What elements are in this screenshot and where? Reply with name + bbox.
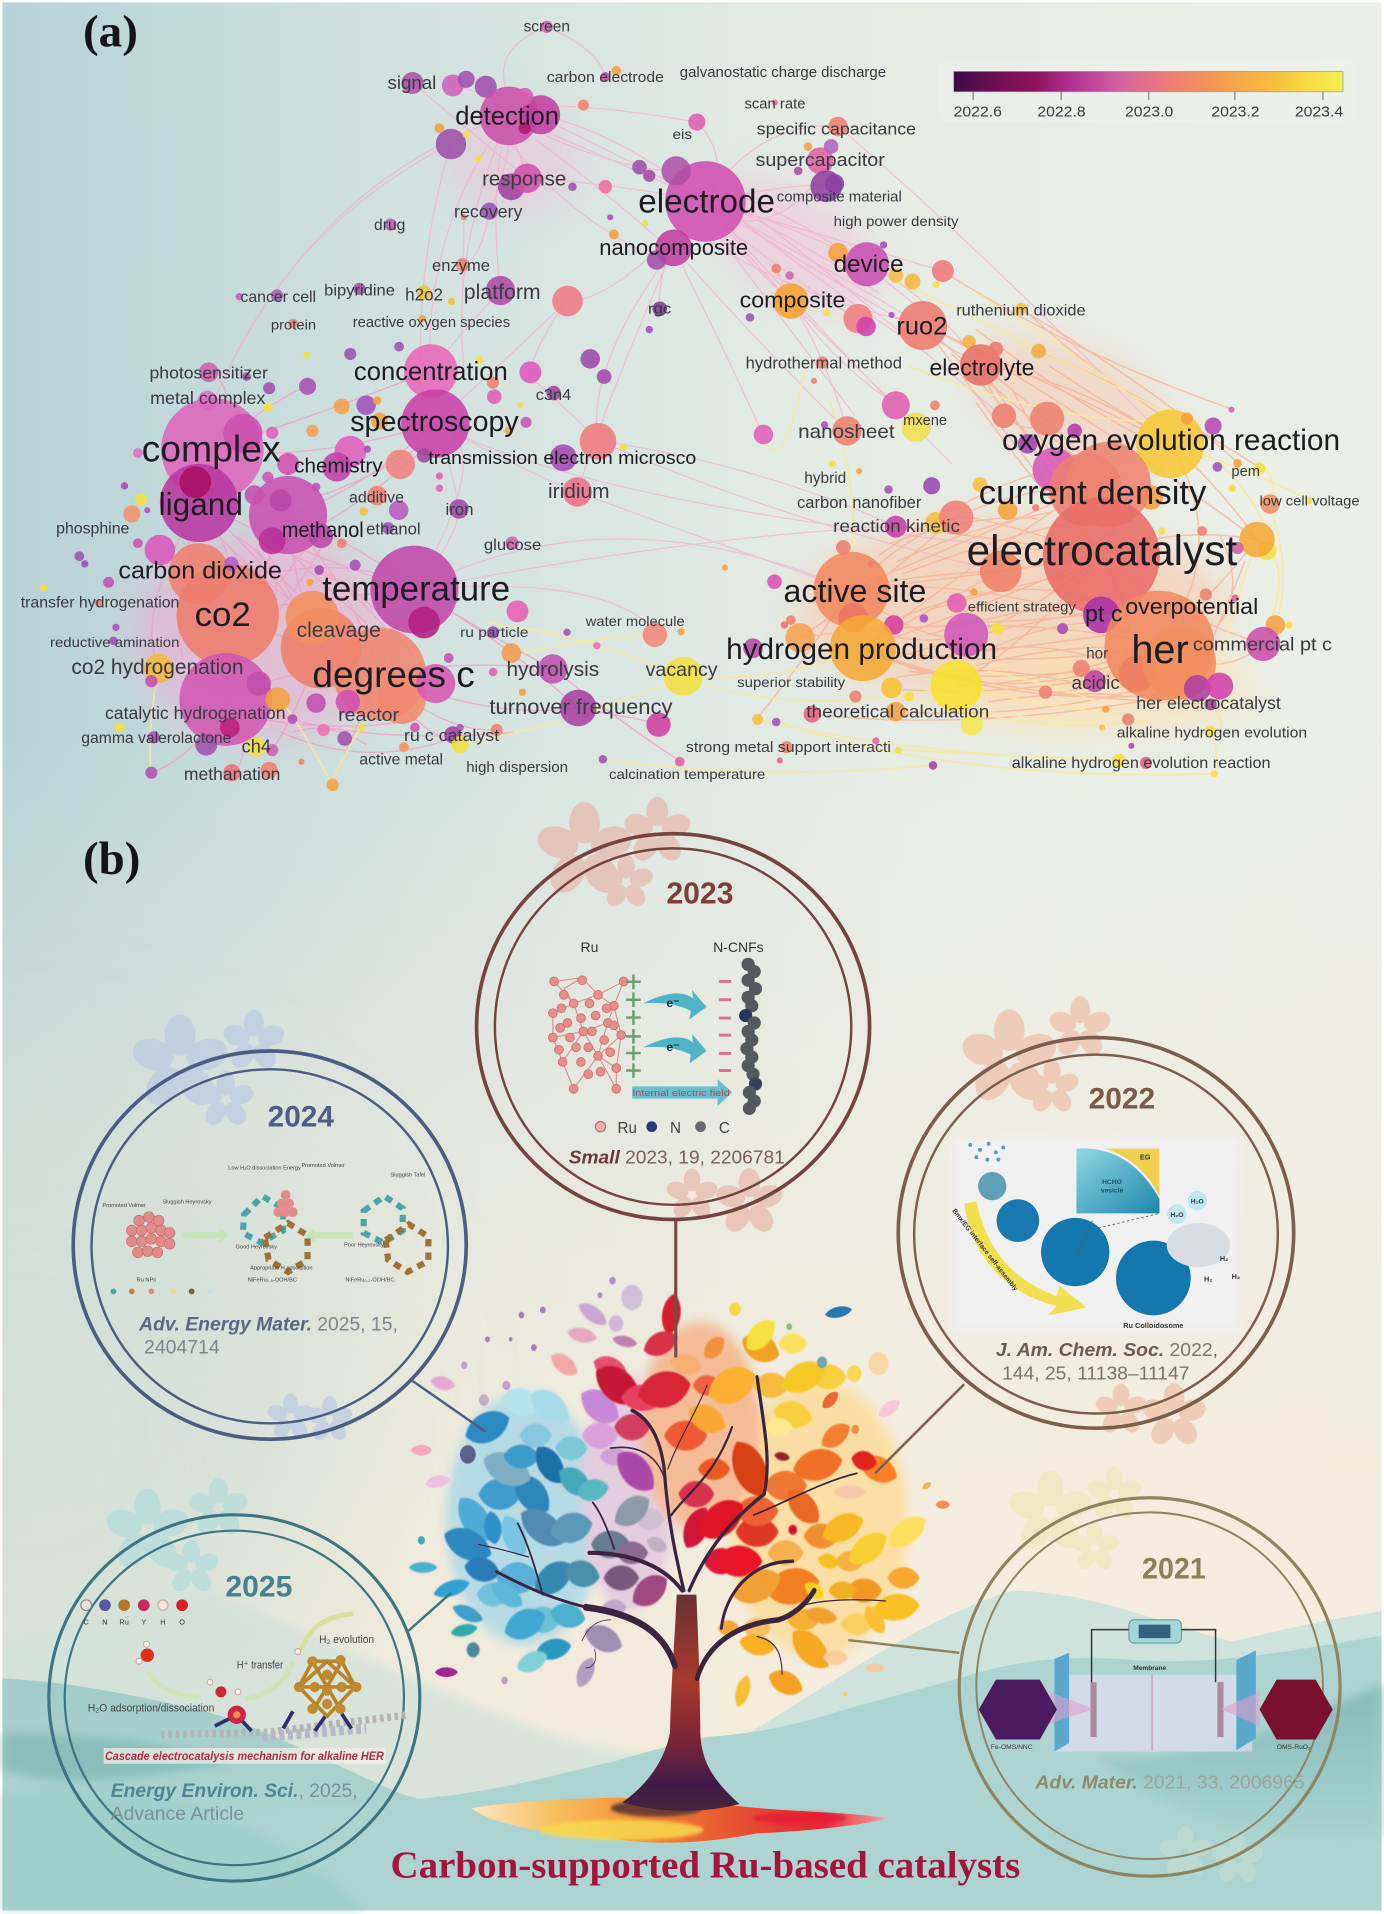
decorative flowers behind timeline circles: [103, 797, 1265, 1885]
element legend: N: [102, 1618, 108, 1627]
keyword: reductive amination: reductive amination: [50, 634, 179, 650]
colour legend: publication year: 2022.8: [1037, 105, 1086, 121]
panel: 2021 milestone: [959, 1498, 1340, 1876]
keyword: c3n4: c3n4: [536, 387, 571, 404]
keyword: commercial pt c: commercial pt c: [1193, 635, 1332, 655]
keyword: theoretical calculation: theoretical calculation: [806, 702, 989, 722]
element legend: N: [670, 1120, 681, 1137]
keyword: ruo2: ruo2: [896, 312, 947, 340]
keyword: rgc: rgc: [648, 302, 671, 318]
keyword: transfer hydrogenation: transfer hydrogenation: [21, 594, 179, 611]
keyword: pt c: pt c: [1085, 600, 1122, 626]
year: 2021: 2021: [1142, 1552, 1206, 1585]
panel: 2023 milestone: [477, 834, 870, 1219]
keyword: concentration: concentration: [354, 358, 508, 386]
schematic captions: NiFeRu₀.₅-OOH/BC: [248, 1278, 297, 1284]
network link density washes: [134, 104, 1257, 739]
schematic: electrolyser cell: [979, 1620, 1333, 1752]
keyword: electrode: electrode: [638, 182, 775, 219]
schematic labels: Ru and N-CNFs: Ru: [581, 939, 598, 955]
colour legend: publication year: 2023.4: [1295, 105, 1343, 121]
colour legend: publication year: 2023.2: [1211, 105, 1260, 121]
electron transfer arrows: e⁻: [666, 1040, 680, 1054]
citation: Energy Environ. Sci.: Energy Environ. Sci., 2025,: [111, 1780, 358, 1802]
panel label: (b): (b): [83, 834, 140, 885]
panel: 2024 milestone: [73, 1051, 466, 1439]
schematic: cascade mechanism: H₂ evolution: [319, 1634, 374, 1646]
keyword: degrees c: degrees c: [312, 654, 475, 695]
keyword: efficient strategy: efficient strategy: [968, 600, 1076, 615]
panel: 2025 milestone: [49, 1515, 420, 1881]
keyword: methanation: methanation: [184, 765, 280, 784]
network nodes: top cluster: [236, 21, 746, 364]
keyword: superior stability: superior stability: [737, 675, 845, 690]
keyword: calcination temperature: calcination temperature: [609, 767, 765, 783]
schematic: electrolyser cell: Fe-OMS/NNC: [991, 1744, 1033, 1751]
citation: Adv. Energy Mater.: 2404714: [144, 1338, 220, 1359]
year: 2023: 2023: [666, 877, 733, 910]
keyword: spectroscopy: spectroscopy: [350, 406, 519, 438]
schematic labels: Ru and N-CNFs: N-CNFs: [713, 939, 764, 955]
keyword: hor: hor: [1086, 646, 1108, 663]
schematic: electrolyser cell: OMS-RuO₂: [1277, 1744, 1311, 1751]
schematic: Ru colloidosome assembly: H₂O: [1170, 1212, 1184, 1219]
keyword: signal: signal: [387, 72, 436, 93]
keyword: reactor: reactor: [338, 705, 399, 726]
element legend: C: [719, 1120, 730, 1137]
keyword: reaction kinetic: reaction kinetic: [833, 516, 960, 536]
schematic: Ru colloidosome assembly: H₂O: [1191, 1199, 1204, 1206]
keyword: ch4: ch4: [242, 737, 271, 758]
keyword: glucose: glucose: [484, 537, 541, 554]
keyword: co2 hydrogenation: co2 hydrogenation: [71, 656, 243, 679]
keyword: iridium: iridium: [548, 480, 610, 503]
keyword: reactive oxygen species: reactive oxygen species: [353, 315, 510, 331]
colour legend: publication year: 2022.6: [954, 105, 1002, 121]
schematic: Ru colloidosome assembly: [950, 1138, 1240, 1331]
keyword: eis: eis: [672, 127, 692, 142]
citation: Energy Environ. Sci.: [111, 1780, 358, 1825]
schematic: Ru colloidosome assembly: H₂: [1220, 1254, 1228, 1263]
electron transfer arrows: e⁻: [666, 996, 680, 1010]
element legend: Ru: [618, 1120, 637, 1137]
schematic: MOF frameworks and arrows: [182, 1190, 428, 1272]
element legend: C: [84, 1618, 89, 1627]
N-CNF carbon chain: [739, 958, 762, 1115]
schematic captions: Poor Heyrovsky: [344, 1242, 384, 1248]
keyword: iron: iron: [445, 500, 474, 519]
keyword: high dispersion: high dispersion: [466, 760, 568, 776]
schematic captions: Good Heyrovsky: [236, 1245, 277, 1251]
charge signs: [626, 974, 731, 1078]
keyword: gamma valerolactone: gamma valerolactone: [81, 729, 231, 747]
red caption: cascade electrocatalysis: Cascade electrocatalysis mechanism for alkaline HER: [105, 1750, 384, 1763]
leaves: orange crown: [668, 1327, 920, 1638]
keyword: nanocomposite: nanocomposite: [599, 235, 748, 260]
keyword: overpotential: overpotential: [1125, 594, 1258, 619]
schematic: Ru colloidosome assembly: H₂: [1204, 1275, 1213, 1284]
keyword: water molecule: water molecule: [585, 613, 685, 629]
schematic captions: Promoted Volmer: [301, 1163, 345, 1169]
citation: J. Am. Chem. Soc.: J. Am. Chem. Soc. 2022,: [996, 1339, 1218, 1360]
keyword: carbon nanofiber: carbon nanofiber: [797, 494, 922, 512]
schematic: Ru colloidosome assembly: H₂: [1232, 1272, 1240, 1281]
keyword: bipyridine: bipyridine: [324, 282, 395, 299]
keyword: ligand: ligand: [159, 486, 243, 522]
electron transfer arrows: [632, 990, 732, 1106]
keyword: platform: platform: [464, 281, 541, 304]
keyword: turnover frequency: turnover frequency: [489, 696, 673, 719]
keyword: phosphine: phosphine: [56, 519, 129, 537]
keyword: device: device: [834, 251, 904, 278]
keyword: protein: protein: [271, 318, 316, 333]
year: 2024: 2024: [268, 1101, 334, 1134]
soft watercolor washes: [446, 1323, 907, 1657]
keyword: recovery: recovery: [454, 201, 522, 221]
keyword: scan rate: scan rate: [744, 97, 806, 113]
schematic: Ru colloidosome assembly: EG: [1140, 1153, 1151, 1162]
schematic: Ru colloidosome assembly: Ru Colloidosome: [1123, 1321, 1183, 1330]
citation: J. Am. Chem. Soc.: 144, 25, 11138–11147: [1002, 1362, 1189, 1383]
keyword: alkaline hydrogen evolution reaction: alkaline hydrogen evolution reaction: [1012, 755, 1270, 772]
element legend: O: [179, 1618, 185, 1627]
keyword: active site: active site: [784, 573, 926, 609]
keyword: her: her: [1131, 628, 1189, 672]
network nodes: left cluster: [40, 344, 703, 791]
timeline connector lines: [408, 1219, 964, 1653]
keyword: cancer cell: cancer cell: [240, 289, 316, 306]
citation: Adv. Energy Mater.: Adv. Energy Mater. 2025, 15,: [138, 1315, 398, 1336]
keyword: hydrogen production: hydrogen production: [726, 633, 997, 666]
colour legend: publication year: 2023.0: [1125, 105, 1173, 121]
keyword: her electrocatalyst: her electrocatalyst: [1136, 693, 1281, 713]
year: 2025: 2025: [225, 1571, 292, 1604]
keyword: current density: current density: [979, 474, 1207, 512]
schematic: Ru colloidosome assembly: HCHO: [1102, 1179, 1122, 1186]
keyword: specific capacitance: specific capacitance: [757, 119, 916, 138]
element legend: [595, 1120, 730, 1137]
schematic: cascade mechanism: [88, 1614, 406, 1737]
citation: Adv. Mater.: Adv. Mater. 2021, 33, 2006965: [1034, 1771, 1305, 1792]
schematic captions: [103, 1163, 425, 1284]
schematic labels: Ru and N-CNFs: [581, 939, 764, 955]
keyword: additive: additive: [349, 489, 404, 506]
panel label: (a): (a): [83, 6, 138, 56]
keyword: photosensitizer: photosensitizer: [150, 363, 268, 382]
keyword: ru particle: ru particle: [460, 624, 529, 640]
leaves: purple and grey crown: [430, 1285, 673, 1691]
schematic captions: Sluggish Tafel: [391, 1173, 425, 1179]
keyword: vacancy: vacancy: [646, 659, 718, 681]
citation: Energy Environ. Sci.: Advance Article: [111, 1803, 244, 1825]
keyword: temperature: temperature: [322, 570, 510, 609]
keyword: acidic: acidic: [1072, 672, 1120, 693]
schematic captions: Sluggish Heyrovsky: [162, 1200, 212, 1206]
colour legend: publication year: [939, 60, 1356, 122]
keyword: composite material: composite material: [777, 189, 902, 205]
keyword: ruthenium dioxide: ruthenium dioxide: [956, 303, 1086, 320]
schematic: Ru colloidosome assembly: vesicle: [1101, 1188, 1123, 1195]
schematic captions: Low H₂O dissociation Energy: [228, 1165, 301, 1171]
element legend: [81, 1599, 188, 1627]
schematic: cascade mechanism: H⁺ transfer: [237, 1660, 284, 1672]
keyword: catalytic hydrogenation: catalytic hydrogenation: [105, 704, 286, 723]
keyword: response: response: [482, 168, 566, 191]
keyword: screen: screen: [524, 19, 570, 36]
element legend: [111, 1289, 213, 1294]
keyword: co2: co2: [195, 596, 251, 634]
leaves: red crown: [589, 1292, 797, 1577]
electron transfer arrows: Internal electric field: [632, 1088, 730, 1098]
keyword: enzyme: enzyme: [432, 256, 490, 275]
schematic captions: Ru NPs: [137, 1278, 156, 1284]
citation: Adv. Energy Mater.: [138, 1315, 398, 1359]
keyword: low cell voltage: low cell voltage: [1260, 493, 1360, 509]
keyword: methanol: methanol: [282, 519, 364, 542]
keyword: detection: detection: [455, 103, 559, 131]
keyword: mxene: mxene: [903, 413, 947, 429]
keyword: nanosheet: nanosheet: [798, 421, 895, 443]
Ru lattice: [548, 976, 628, 1093]
network links: [150, 27, 1308, 785]
keyword: strong metal support interacti: strong metal support interacti: [686, 740, 891, 756]
keyword: h2o2: h2o2: [405, 285, 443, 304]
keyword: oxygen evolution reaction: oxygen evolution reaction: [1002, 424, 1340, 457]
tree trunk: [622, 1595, 740, 1811]
keyword: supercapacitor: supercapacitor: [755, 149, 885, 170]
keyword: chemistry: chemistry: [294, 454, 383, 477]
keyword: carbon electrode: carbon electrode: [547, 70, 664, 86]
ground splash: [471, 1798, 886, 1843]
keyword: transmission electron microsco: transmission electron microsco: [428, 447, 696, 468]
keyword: carbon dioxide: carbon dioxide: [118, 558, 282, 585]
element legend: Y: [141, 1618, 146, 1627]
keyword: cleavage: cleavage: [297, 619, 381, 642]
keyword: drug: drug: [374, 217, 405, 234]
panel: 2022 milestone: [898, 1038, 1294, 1428]
keyword: electrolyte: electrolyte: [930, 354, 1034, 380]
tree illustration: [409, 1277, 950, 1843]
element legend: Ru: [119, 1618, 129, 1627]
keyword: electrocatalyst: electrocatalyst: [967, 527, 1237, 574]
leaves: yellow crown: [732, 1312, 931, 1709]
keyword: active metal: active metal: [359, 752, 443, 769]
keyword: galvanostatic charge discharge: galvanostatic charge discharge: [680, 65, 886, 81]
keyword: hydrolysis: hydrolysis: [506, 659, 599, 681]
schematic: Ru colloidosome assembly: Bmx/EG interface self-assembly: [950, 1208, 1019, 1293]
panel: (a) keyword co-occurrence network: [21, 19, 1360, 791]
leaves: blue crown: [409, 1381, 610, 1677]
schematic: Ru nanoparticle: [126, 1212, 175, 1258]
citation: Small: Small 2023, 19, 2206781: [569, 1146, 785, 1167]
year: 2022: 2022: [1089, 1082, 1155, 1115]
keyword: hydrothermal method: hydrothermal method: [746, 355, 902, 373]
schematic captions: Appropriate H adsorption: [250, 1265, 313, 1271]
keyword: hybrid: hybrid: [804, 470, 846, 487]
title: Carbon-supported Ru-based catalysts: [391, 1844, 1020, 1886]
element legend: H: [160, 1618, 166, 1627]
keyword: pem: pem: [1231, 464, 1260, 480]
floating petals and specks: [411, 1277, 950, 1696]
keyword: composite: composite: [740, 288, 845, 313]
tree branches: [479, 1377, 886, 1678]
keyword: complex: complex: [142, 427, 281, 469]
schematic: electrolyser cell: Membrane: [1133, 1665, 1166, 1672]
keyword: high power density: high power density: [834, 213, 960, 229]
schematic captions: Promoted Volmer: [103, 1203, 146, 1209]
keyword: ethanol: ethanol: [366, 520, 421, 539]
network nodes: right cluster: [722, 99, 1313, 778]
keyword: metal complex: metal complex: [150, 389, 266, 408]
network keyword labels: [21, 19, 1360, 784]
schematic captions: NiFeRu₀.₂-OOH/BC: [345, 1278, 394, 1284]
schematic: cascade mechanism: H₂O adsorption/dissociation: [88, 1702, 214, 1714]
keyword: ru c catalyst: ru c catalyst: [404, 727, 500, 745]
citation: J. Am. Chem. Soc.: [996, 1339, 1218, 1383]
keyword: alkaline hydrogen evolution: alkaline hydrogen evolution: [1117, 724, 1307, 741]
